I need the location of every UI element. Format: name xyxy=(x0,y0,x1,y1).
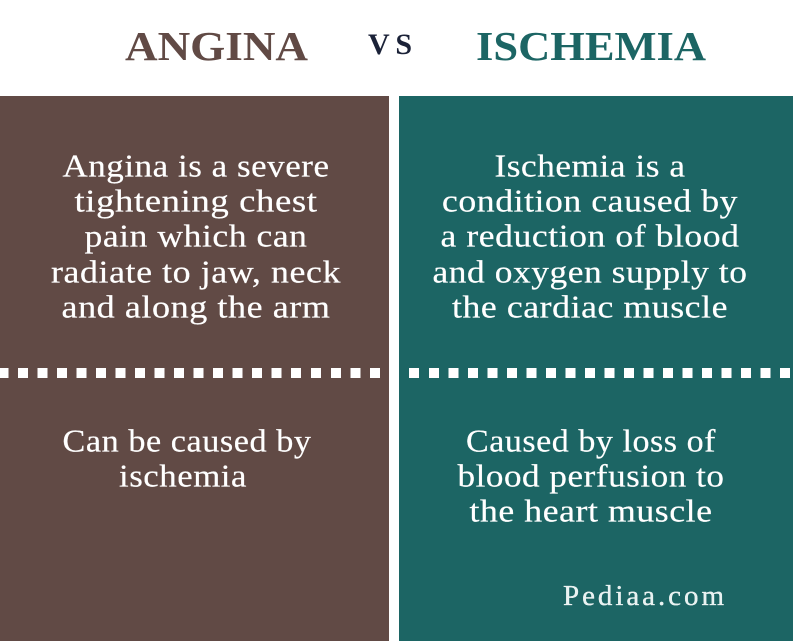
logo: Pediaa.com: Pediaa.com xyxy=(563,580,724,612)
dotted divider xyxy=(0,368,790,378)
ischemia definition text: a reduction of blood xyxy=(440,218,740,254)
angina cause text: Can be caused by xyxy=(62,422,312,458)
title: Ischemia: ISCHEMIA xyxy=(476,23,706,69)
ischemia definition text: condition caused by xyxy=(442,182,738,218)
title: Angina: ANGINA xyxy=(125,23,308,69)
angina definition text xyxy=(51,148,341,324)
ischemia definition text: and oxygen supply to xyxy=(432,254,748,290)
angina definition text: radiate to jaw, neck xyxy=(51,254,341,290)
panel: ischemia xyxy=(399,96,793,641)
angina definition text: Angina is a severe xyxy=(62,148,330,184)
ischemia cause text: the heart muscle xyxy=(470,492,712,528)
angina cause text: ischemia xyxy=(119,458,247,494)
angina cause text xyxy=(62,422,312,494)
angina definition text: pain which can xyxy=(84,218,308,254)
vs label: VS xyxy=(368,28,412,61)
angina definition text: and along the arm xyxy=(62,288,330,324)
ischemia cause text xyxy=(458,422,724,528)
panel: angina xyxy=(0,96,389,641)
ischemia cause text: Caused by loss of xyxy=(466,422,716,458)
ischemia definition text: Ischemia is a xyxy=(494,148,686,184)
ischemia definition text xyxy=(432,148,748,324)
ischemia definition text: the cardiac muscle xyxy=(452,288,728,324)
ischemia cause text: blood perfusion to xyxy=(458,458,724,494)
angina definition text: tightening chest xyxy=(74,182,318,218)
